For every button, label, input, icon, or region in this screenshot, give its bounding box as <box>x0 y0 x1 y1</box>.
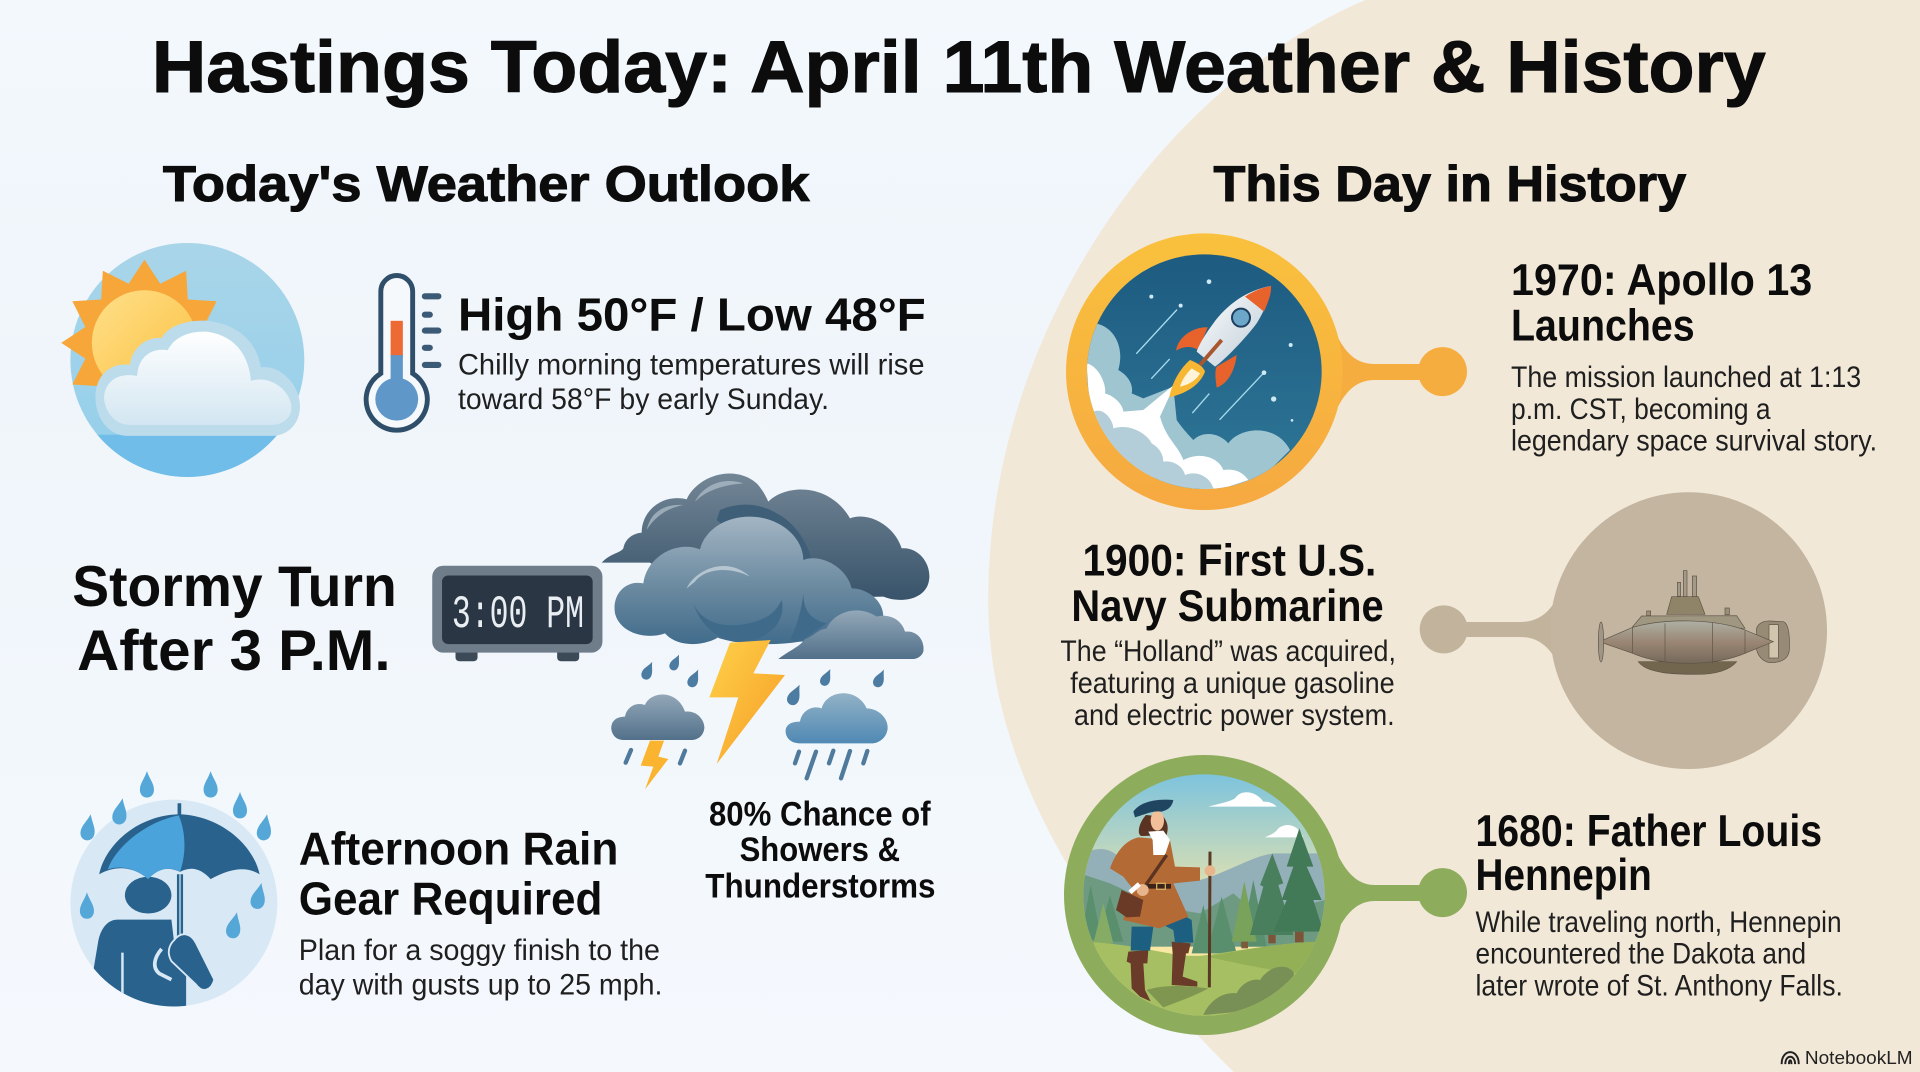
text: rain gear: Plan for a soggy finish to the <box>299 934 660 967</box>
text: stormy turn: After 3 P.M. <box>77 619 391 683</box>
rain drops <box>79 771 274 940</box>
text: 1900 submarine: The “Holland” was acquired, <box>1060 635 1396 668</box>
title: Hastings Today: April 11th Weather & History <box>152 25 1766 108</box>
text: temperature: toward 58°F by early Sunday. <box>458 383 829 416</box>
text: temperature: Chilly morning temperatures will rise <box>458 349 924 382</box>
text: 1680 Hennepin: Hennepin <box>1476 851 1652 900</box>
text: 1680 Hennepin <box>1476 807 1843 1003</box>
text: rain chance <box>705 795 936 906</box>
text: rain gear: Afternoon Rain <box>299 822 618 874</box>
text: rain gear: day with gusts up to 25 mph. <box>299 968 662 1001</box>
text: 1680 Hennepin: 1680: Father Louis <box>1476 807 1822 856</box>
event: Hennepin explorer medallion <box>1064 755 1467 1035</box>
text: 1970 Apollo 13: Launches <box>1511 301 1695 350</box>
text: 1900 submarine: Navy Submarine <box>1071 582 1384 631</box>
text: rain chance: Thunderstorms <box>705 868 936 906</box>
text: 1970 Apollo 13: legendary space survival story. <box>1511 425 1877 458</box>
text: rain chance: 80% Chance of <box>709 795 931 833</box>
panel: weather outlook <box>61 156 936 1016</box>
icon: digital clock: 3:00 PM <box>452 588 584 641</box>
watermark: NotebookLM: NotebookLM <box>1805 1047 1913 1068</box>
heading: history: This Day in History <box>1213 156 1686 212</box>
text: 1680 Hennepin: While traveling north, Hennepin <box>1476 906 1842 939</box>
panel: history background <box>988 0 1920 1072</box>
rain <box>640 653 888 707</box>
rocket <box>1169 286 1271 397</box>
text: 1680 Hennepin: later wrote of St. Anthony Falls. <box>1476 970 1843 1003</box>
icon: digital clock <box>432 566 602 661</box>
event: submarine medallion <box>1420 492 1827 769</box>
text: 1900 submarine: featuring a unique gasoline <box>1070 667 1395 700</box>
icon: storm clouds with lightning <box>602 474 929 789</box>
text: 1900 submarine <box>1060 537 1396 732</box>
icon: thermometer <box>366 276 438 430</box>
heading: weather: Today's Weather Outlook <box>163 156 809 212</box>
event: Apollo 13 rocket medallion <box>1066 233 1467 510</box>
text: 1970 Apollo 13: 1970: Apollo 13 <box>1511 256 1812 305</box>
text: 1900 submarine: and electric power system. <box>1074 699 1395 732</box>
panel: history <box>1060 156 1877 1035</box>
text: 1970 Apollo 13: The mission launched at 1:13 <box>1511 361 1861 394</box>
text: rain gear: Gear Required <box>299 873 602 925</box>
explorer figure <box>1110 800 1215 1001</box>
text: 1900 submarine: 1900: First U.S. <box>1082 537 1376 586</box>
text: stormy turn <box>72 555 397 683</box>
icon: person with umbrella <box>70 771 277 1016</box>
text: temperature <box>458 289 926 416</box>
text: rain gear <box>299 822 662 1001</box>
text: stormy turn: Stormy Turn <box>72 555 397 619</box>
text: 1680 Hennepin: encountered the Dakota and <box>1476 938 1806 971</box>
icon: sun and cloud <box>61 243 304 477</box>
text: 1970 Apollo 13: p.m. CST, becoming a <box>1511 393 1771 426</box>
text: temperature: High 50°F / Low 48°F <box>458 289 926 341</box>
text: rain chance: Showers & <box>740 831 900 869</box>
text: 1970 Apollo 13 <box>1511 256 1877 458</box>
